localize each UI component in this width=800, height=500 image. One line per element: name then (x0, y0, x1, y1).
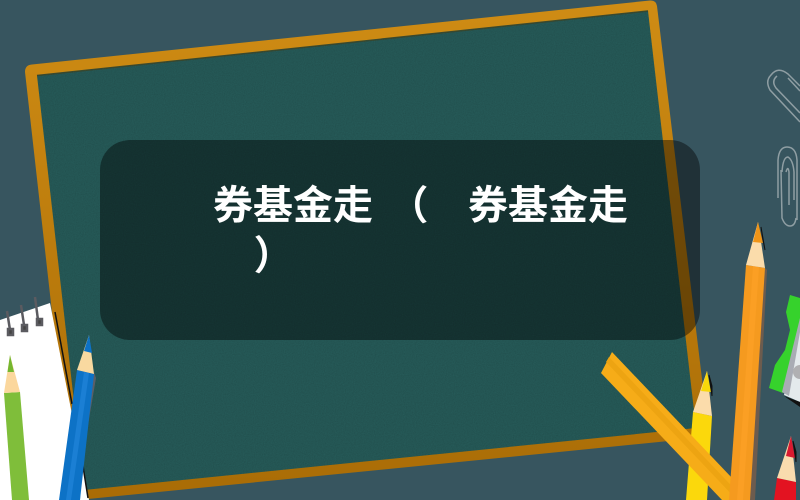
title text: （ (388, 184, 428, 228)
notebook page (0, 303, 89, 500)
blue pencil (59, 335, 96, 500)
orange pencil (729, 222, 767, 500)
title text: ） (254, 234, 294, 278)
sharpener metal blade (784, 326, 800, 402)
sharpener grey edge (782, 318, 800, 396)
title text: 券基金走 (213, 184, 373, 228)
board surface (37, 11, 696, 490)
notebook spiral rings (7, 297, 42, 335)
green pencil (4, 355, 29, 500)
title text (213, 184, 628, 278)
notebook shadow edge (55, 312, 72, 404)
board texture (37, 11, 697, 491)
paperclip bottom (778, 147, 797, 226)
dark title panel (100, 140, 700, 340)
red pencil (774, 436, 796, 500)
notebook (0, 297, 89, 500)
yellow pencil (686, 371, 712, 500)
frame inner shadow (37, 11, 648, 76)
sharpener (769, 295, 800, 407)
sharpener green casing (769, 295, 800, 393)
sharpener screw (793, 365, 800, 379)
ruler (601, 352, 753, 500)
paperclip top (768, 70, 800, 122)
title text: 券基金走 (468, 184, 628, 228)
sharpener shadow (784, 396, 800, 407)
